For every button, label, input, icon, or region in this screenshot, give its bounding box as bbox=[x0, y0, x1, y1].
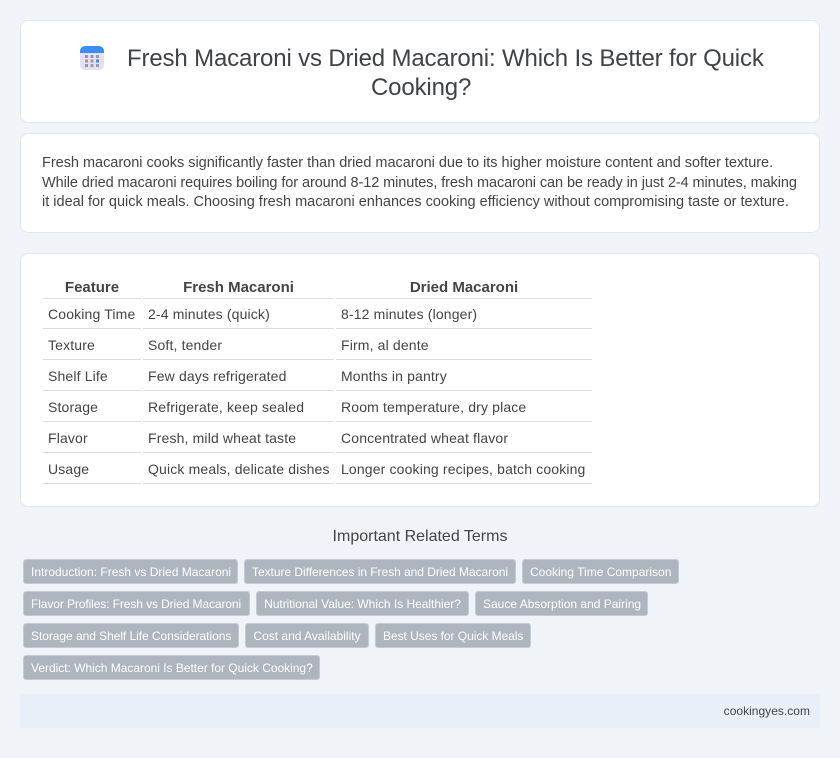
text block: introduction: Fresh macaroni cooks significantly faster than dried macaroni due to its higher moisture content and softer texture. bbox=[42, 155, 773, 171]
panel: comparison table: Room temperature, dry place bbox=[341, 399, 526, 415]
text block: introduction: it ideal for quick meals. Choosing fresh macaroni enhances cooking efficiency without compromising taste or texture. bbox=[42, 194, 789, 210]
tags: related terms: Cooking Time Comparison bbox=[530, 565, 671, 579]
panel: comparison table: Usage bbox=[48, 461, 89, 477]
panel: comparison table: Storage bbox=[48, 399, 98, 415]
panel: comparison table: 2-4 minutes (quick) bbox=[148, 306, 270, 322]
tags: related terms: Introduction: Fresh vs Dried Macaroni bbox=[31, 565, 231, 579]
table header: dried macaroni bbox=[336, 279, 592, 299]
tags: related terms: Sauce Absorption and Pairing bbox=[483, 597, 641, 611]
panel: comparison table: Firm, al dente bbox=[341, 337, 429, 353]
tags: related terms bbox=[23, 559, 679, 680]
footer source text: cookingyes.com bbox=[724, 704, 810, 718]
tags: related terms: Verdict: Which Macaroni Is Better for Quick Cooking? bbox=[31, 661, 313, 675]
heading: related terms: Important Related Terms bbox=[333, 528, 507, 545]
title: Cooking? bbox=[371, 74, 471, 101]
icon: calendar bbox=[80, 46, 104, 70]
title bbox=[127, 45, 764, 101]
panel: comparison table: Cooking Time bbox=[48, 306, 135, 322]
tags: related terms: Best Uses for Quick Meals bbox=[383, 629, 523, 643]
panel: comparison table: Few days refrigerated bbox=[148, 368, 287, 384]
tags: related terms: Texture Differences in Fresh and Dried Macaroni bbox=[252, 565, 508, 579]
panel: comparison table: Longer cooking recipes, batch cooking bbox=[341, 461, 585, 477]
footer bbox=[20, 694, 820, 728]
table header: fresh macaroni bbox=[143, 279, 334, 299]
title: Fresh Macaroni vs Dried Macaroni: Which Is Better for Quick bbox=[127, 45, 764, 72]
panel: comparison table: Refrigerate, keep sealed bbox=[148, 399, 304, 415]
panel: comparison table: Soft, tender bbox=[148, 337, 222, 353]
panel: comparison table: Flavor bbox=[48, 430, 88, 446]
table header: fresh macaroni: Fresh Macaroni bbox=[183, 279, 294, 296]
panel: introduction bbox=[20, 133, 820, 233]
panel: comparison table: Months in pantry bbox=[341, 368, 447, 384]
panel: comparison table: Concentrated wheat flavor bbox=[341, 430, 508, 446]
table header: feature: Feature bbox=[65, 279, 119, 296]
table header: feature bbox=[43, 279, 141, 299]
tags: related terms: Flavor Profiles: Fresh vs Dried Macaroni bbox=[31, 597, 241, 611]
panel: title header bbox=[20, 20, 820, 123]
panel: comparison table: Fresh, mild wheat taste bbox=[148, 430, 296, 446]
panel: comparison table: Shelf Life bbox=[48, 368, 108, 384]
tags: related terms: Nutritional Value: Which Is Healthier? bbox=[264, 597, 461, 611]
panel: comparison table: Quick meals, delicate dishes bbox=[148, 461, 330, 477]
tags: related terms: Cost and Availability bbox=[253, 629, 361, 643]
text block: introduction bbox=[42, 155, 797, 210]
panel: comparison table: Texture bbox=[48, 337, 95, 353]
tags: related terms: Storage and Shelf Life Considerations bbox=[31, 629, 231, 643]
text block: introduction: While dried macaroni requires boiling for around 8-12 minutes, fresh macaroni can be ready in just 2-4 minutes, making bbox=[42, 174, 797, 190]
panel: comparison table bbox=[20, 253, 820, 507]
table header: dried macaroni: Dried Macaroni bbox=[410, 279, 518, 296]
panel: comparison table: 8-12 minutes (longer) bbox=[341, 306, 477, 322]
